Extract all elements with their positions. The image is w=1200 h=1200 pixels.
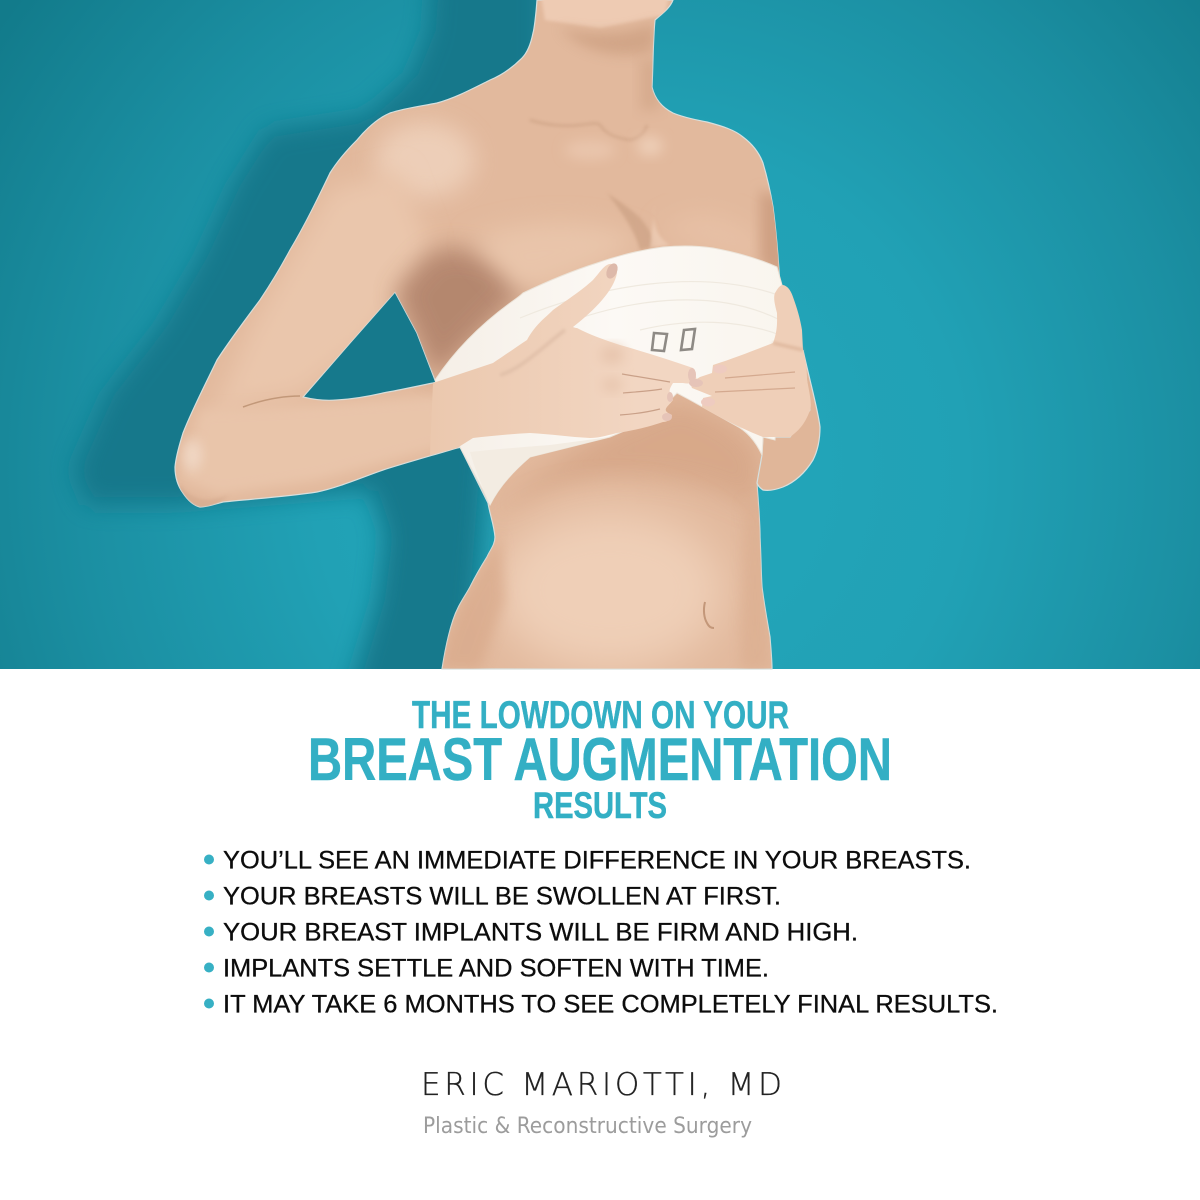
logo: practice name and tagline: Plastic & Reconstructive Surgery [423, 1114, 752, 1139]
title: THE LOWDOWN ON YOUR [412, 694, 789, 737]
elbow crease [243, 396, 300, 407]
bullet list: IT MAY TAKE 6 MONTHS TO SEE COMPLETELY FINAL RESULTS. [223, 990, 998, 1018]
title [308, 694, 892, 826]
bandage clips [652, 329, 695, 351]
logo: practice name and tagline: ERIC MARIOTTI, MD [421, 1067, 782, 1103]
skin shading [175, 0, 785, 670]
right forearm [757, 350, 820, 490]
wall shadow of the figure [73, 0, 545, 700]
bullet list: YOUR BREASTS WILL BE SWOLLEN AT FIRST. [223, 882, 781, 910]
right hand [689, 285, 811, 437]
logo: practice name and tagline [421, 1067, 782, 1139]
bullet list: YOUR BREAST IMPLANTS WILL BE FIRM AND HIGH. [223, 918, 858, 946]
left hand [430, 262, 697, 455]
bullet list: YOU’LL SEE AN IMMEDIATE DIFFERENCE IN YOUR BREASTS. [223, 846, 971, 874]
photo figure: torso with bandage and hands [175, 0, 820, 670]
bullet list [204, 846, 998, 1018]
title: RESULTS [533, 785, 667, 826]
navel [704, 602, 714, 628]
photo background: teal panel [0, 0, 1200, 669]
title: BREAST AUGMENTATION [308, 726, 892, 793]
bullet list: IMPLANTS SETTLE AND SOFTEN WITH TIME. [223, 954, 769, 982]
bandage [435, 246, 782, 505]
skin silhouette [175, 0, 782, 669]
